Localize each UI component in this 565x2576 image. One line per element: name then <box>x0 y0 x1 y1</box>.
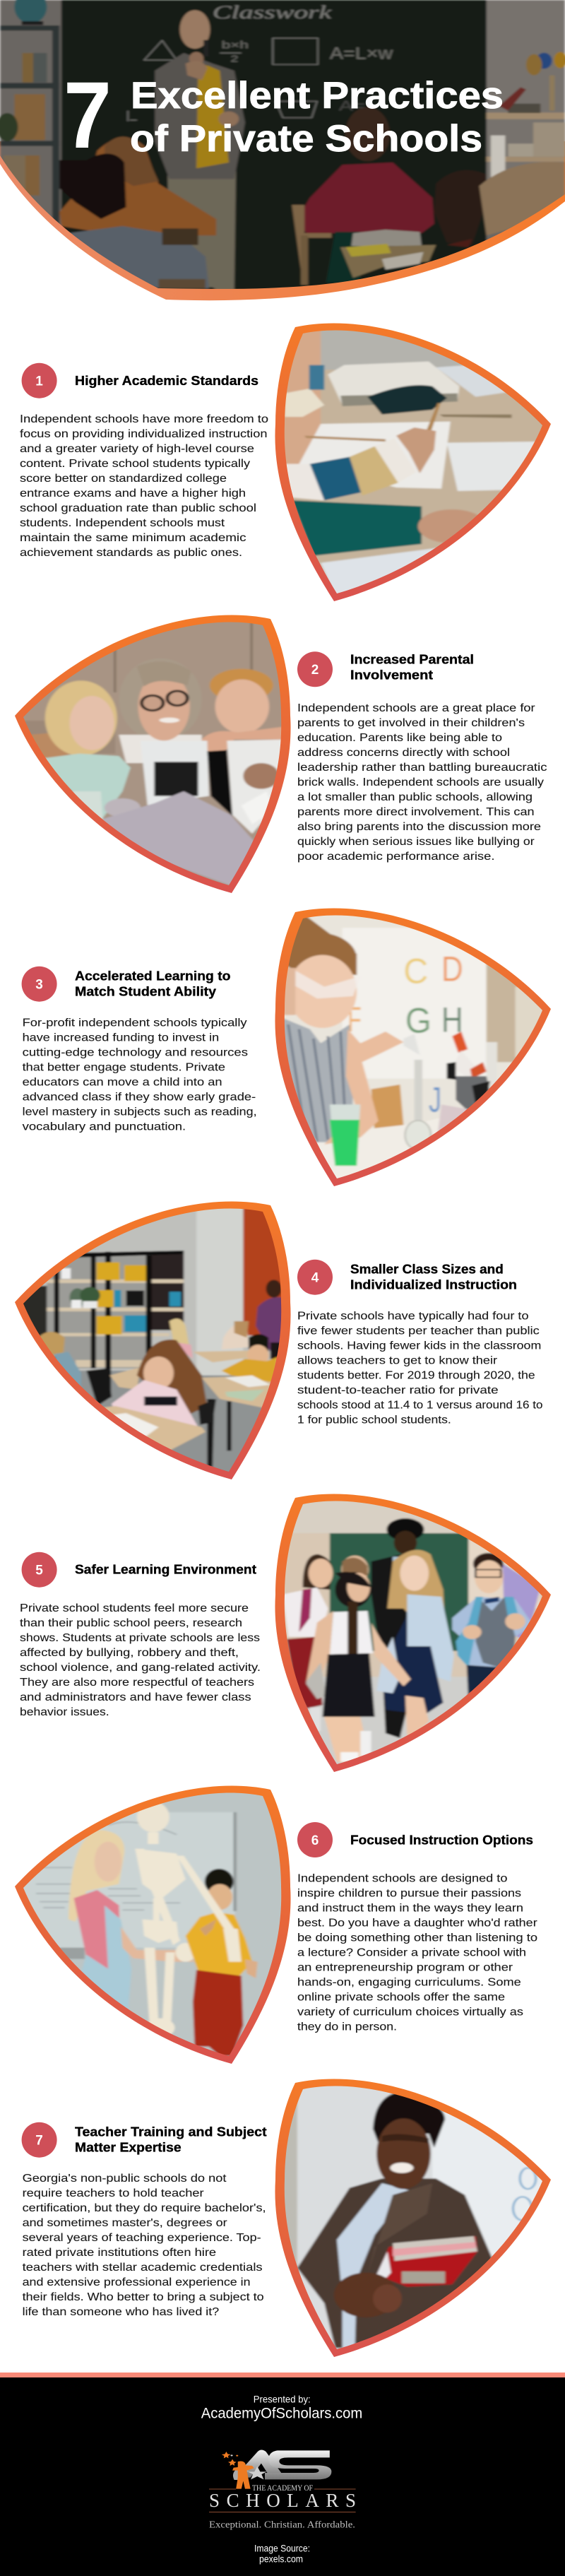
photo frame 4 <box>15 1202 291 1479</box>
body text 1: focus on providing individualized instruction <box>20 428 267 440</box>
photo frame 2 <box>15 615 291 893</box>
photo frame 1 <box>275 324 551 601</box>
heading 1: Higher Academic Standards <box>75 374 258 388</box>
body text 7: life than someone who has lived it? <box>23 2306 219 2318</box>
body text 6: hands-on, engaging curriculums. Some <box>297 1977 521 1989</box>
photo frame 7 <box>275 2079 551 2357</box>
right students <box>434 170 487 245</box>
body text 1: entrance exams and have a higher high <box>20 488 246 500</box>
body text 5: Private school students feel more secure <box>20 1602 249 1614</box>
logo orange child with stars <box>222 2452 254 2489</box>
logo: The Academy of Scholars <box>209 2450 356 2531</box>
body text 2: parents to get involved in their children's <box>297 717 525 729</box>
website address: AcademyOfScholars.com <box>201 2406 362 2422</box>
title line two: of Private Schools <box>130 118 482 160</box>
body text 3: that better engage students. Private <box>23 1061 225 1073</box>
photo 2: grandmother reading with children <box>23 622 281 885</box>
heading 7: Matter Expertise <box>75 2141 182 2155</box>
body text 7: certification, but they do require bachelor's, <box>23 2202 266 2214</box>
number badge 7 <box>22 2122 57 2158</box>
body text 1: Independent schools have more freedom to <box>20 413 268 425</box>
body text 7: several years of teaching experience. Top- <box>23 2232 261 2244</box>
body text 7: and extensive professional experience in <box>23 2276 251 2288</box>
body text 6: best. Do you have a daughter who'd rather <box>297 1918 537 1930</box>
body text 1: content. Private school students typically <box>20 458 250 470</box>
hero classroom photo: Classwork <box>213 2 332 23</box>
number badge 6: 6 <box>311 1833 319 1848</box>
number badge 5 <box>22 1552 57 1588</box>
heading 4: Smaller Class Sizes and <box>350 1263 504 1277</box>
body text 4: student-to-teacher ratio for private <box>297 1384 499 1396</box>
photo 6: children with skeleton model <box>23 1793 281 2056</box>
body text 1: achievement standards as public ones. <box>20 547 242 559</box>
hero classroom photo <box>0 0 565 289</box>
body text 1 <box>20 413 268 559</box>
image source label: Image Source: <box>254 2543 310 2554</box>
hero title <box>64 63 504 168</box>
logo wordmark scholars: SCHOLARS <box>209 2490 356 2511</box>
section 6: Focused Instruction Options <box>11 1785 537 2068</box>
body text 7: and sometimes master's, degrees or <box>23 2217 227 2229</box>
photo 1: student writing at desk <box>284 331 542 593</box>
body text 4: Private schools have typically had four to <box>297 1310 529 1322</box>
logo AS monogram <box>233 2450 331 2480</box>
photo 3: girl doing science experiment: D <box>441 949 463 988</box>
number badge 3: 3 <box>35 978 43 992</box>
heading 7 <box>75 2125 267 2155</box>
section 1: Higher Academic Standards <box>20 323 562 605</box>
heading 4 <box>350 1263 517 1292</box>
hero classroom photo: A= <box>339 99 366 114</box>
body text 2: parents more direct involvement. This can <box>297 806 535 818</box>
body text 5: school violence, and gang-related activity. <box>20 1662 261 1674</box>
photo frame 5 <box>275 1494 551 1772</box>
right shelf <box>487 112 565 119</box>
body text 3: educators can move a child into an <box>23 1076 222 1088</box>
body text 6: and instruct them in the ways they learn <box>297 1903 523 1915</box>
number badge 6 <box>297 1822 333 1857</box>
logo tagline: Exceptional. Christian. Affordable. <box>209 2520 355 2531</box>
body text 5: shows. Students at private schools are less <box>20 1632 260 1644</box>
body text 4: five fewer students per teacher than public <box>297 1325 540 1337</box>
heading 3: Match Student Ability <box>75 985 216 999</box>
heading 3 <box>75 969 230 999</box>
photo frame 3 <box>275 909 551 1186</box>
body text 4: students better. For 2019 through 2020, the <box>297 1369 535 1381</box>
body text 5 <box>20 1602 261 1718</box>
hero classroom photo: 2 <box>231 54 238 64</box>
back-row students <box>59 138 216 235</box>
body text 7: require teachers to hold teacher <box>23 2187 204 2199</box>
number badge 2 <box>297 651 333 687</box>
body text 6: be doing something other than listening to <box>297 1932 537 1944</box>
body text 2: brick walls. Independent schools are usually <box>297 776 544 788</box>
footer <box>0 2373 565 2576</box>
heading 2: Involvement <box>350 668 433 682</box>
photo 5: group of students and teacher <box>284 1501 542 1764</box>
body text 3: level mastery in subjects such as reading, <box>23 1106 257 1118</box>
body text 6: a lecture? Consider a private school with <box>297 1947 526 1959</box>
number badge 7: 7 <box>35 2134 43 2148</box>
number badge 4: 4 <box>311 1270 319 1286</box>
body text 3: cutting-edge technology and resources <box>23 1046 248 1058</box>
body text 1: and a greater variety of high-level course <box>20 443 254 455</box>
body text 2: address concerns directly with school <box>297 747 510 759</box>
heading 7: Teacher Training and Subject <box>75 2125 267 2139</box>
big number 7: 7 <box>64 63 112 168</box>
body text 3: have increased funding to invest in <box>23 1032 219 1044</box>
body text 6: an entrepreneurship program or other <box>297 1962 513 1974</box>
hero classroom photo: b×h <box>222 40 249 51</box>
shelf left <box>0 25 59 30</box>
number badge 1 <box>22 363 57 398</box>
photo 3: girl doing science experiment: H <box>441 1000 463 1039</box>
photo 3: girl doing science experiment: G <box>405 1000 432 1040</box>
body text 3 <box>23 1017 257 1133</box>
body text 6: Independent schools are designed to <box>297 1873 508 1885</box>
number badge 2: 2 <box>311 663 319 678</box>
photo 3: girl doing science experiment: J <box>429 1080 441 1119</box>
body text 1: school graduation rate than public school <box>20 502 256 514</box>
body text 5: than their public school peers, research <box>20 1617 242 1629</box>
section 2: Increased Parental Involvement <box>11 613 547 895</box>
body text 2 <box>297 702 547 863</box>
chalk writing <box>128 38 318 122</box>
hero classroom photo: A=L×w <box>330 44 393 63</box>
body text 1: maintain the same minimum academic <box>20 532 246 544</box>
logo rules <box>209 2488 356 2512</box>
footer black panel <box>0 2377 565 2576</box>
body text 4: schools. Having fewer kids in the classroom <box>297 1340 541 1352</box>
body text 7: teachers with stellar academic credentials <box>23 2262 263 2274</box>
body text 2: leadership rather than battling bureaucratic <box>297 762 547 774</box>
photo 4: classroom with shelves <box>23 1208 281 1472</box>
hero header <box>0 0 565 330</box>
body text 7: Georgia's non-public schools do not <box>23 2173 227 2185</box>
red hoodie student <box>345 107 390 161</box>
body text 3: advanced class if they show early grade- <box>23 1091 256 1103</box>
body text 1: students. Independent schools must <box>20 517 225 529</box>
body text 4: schools stood at 11.4 to 1 versus around 16 to <box>297 1399 542 1411</box>
hero curved orange border <box>0 141 565 300</box>
section 4: Smaller Class Sizes <box>11 1201 542 1484</box>
heading 4: Individualized Instruction <box>350 1278 517 1292</box>
photo 7: smiling teacher with book <box>284 2086 542 2349</box>
title line one: Excellent Practices <box>131 75 504 117</box>
body text 6: inspire children to pursue their passions <box>297 1888 521 1900</box>
body text 6 <box>297 1873 537 2033</box>
section 3: Accelerated Learning <box>22 909 562 1192</box>
number badge 4 <box>297 1260 333 1295</box>
teacher <box>167 165 236 290</box>
presented by label: Presented by: <box>254 2394 311 2405</box>
photo 3: girl doing science experiment: F <box>347 999 362 1039</box>
section 5: Safer Learning Environment <box>20 1491 562 1773</box>
body text 2: quickly when serious issues like bullying or <box>297 836 535 848</box>
heading 3: Accelerated Learning to <box>75 969 230 983</box>
body text 4 <box>297 1310 542 1426</box>
heading 2 <box>350 652 474 682</box>
body text 2: education. Parents like being able to <box>297 732 502 744</box>
body text 5: and administrators and have fewer class <box>20 1691 251 1703</box>
body text 2: poor academic performance arise. <box>297 851 494 863</box>
body text 7: rated private institutions often hire <box>23 2247 216 2259</box>
body text 1: score better on standardized college <box>20 473 227 485</box>
body text 6: variety of curriculum choices virtually as <box>297 2007 523 2019</box>
body text 5: affected by bullying, robbery and theft, <box>20 1647 239 1659</box>
body text 2: also bring parents into the discussion more <box>297 821 541 833</box>
number badge 1: 1 <box>35 374 43 389</box>
body text 4: allows teachers to get to know their <box>297 1354 498 1366</box>
heading 6: Focused Instruction Options <box>350 1833 533 1847</box>
body text 5: They are also more respectful of teachers <box>20 1677 254 1689</box>
body text 3: For-profit independent schools typically <box>23 1017 247 1029</box>
body text 6: they do in person. <box>297 2021 397 2033</box>
section 7: Teacher Training <box>22 2077 562 2360</box>
body text 2: Independent schools are a great place for <box>297 702 535 714</box>
footer salmon band <box>0 2373 565 2377</box>
body text 6: online private schools offer the same <box>297 1992 505 2004</box>
number badge 5: 5 <box>35 1563 43 1578</box>
photo 3: girl doing science experiment: C <box>403 951 428 991</box>
body text 2: a lot smaller than public schools, allowing <box>297 791 533 803</box>
photo frame 6 <box>15 1786 291 2064</box>
body text 7 <box>23 2173 266 2318</box>
number badge 3 <box>22 967 57 1002</box>
image source site: pexels.com <box>259 2554 303 2565</box>
heading 2: Increased Parental <box>350 652 474 666</box>
photo 3: girl doing science experiment <box>284 916 542 1178</box>
body text 3: vocabulary and punctuation. <box>23 1121 186 1133</box>
body text 7: their fields. Who better to bring a subject to <box>23 2291 264 2303</box>
body text 5: behavior issues. <box>20 1706 109 1718</box>
logo text the academy of: THE ACADEMY OF <box>252 2484 313 2493</box>
body text 4: 1 for public school students. <box>297 1414 451 1426</box>
heading 5: Safer Learning Environment <box>75 1563 256 1577</box>
